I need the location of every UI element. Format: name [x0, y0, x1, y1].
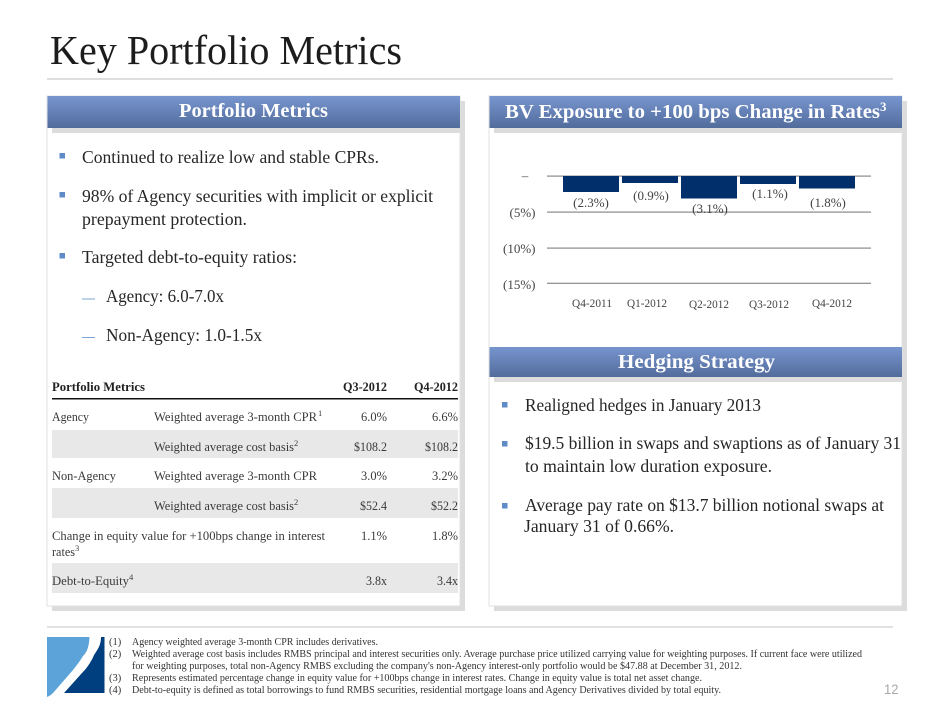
heading: portfolio metrics: Portfolio Metrics — [179, 100, 328, 122]
title: Key Portfolio Metrics — [50, 27, 402, 73]
footnotes — [109, 637, 863, 696]
table: portfolio metrics: Q4-2012 — [414, 379, 458, 394]
bullet list: portfolio metrics: 98% of Agency securities with implicit or explicit — [82, 186, 433, 206]
table: portfolio metrics: Weighted average cost basis — [154, 498, 294, 513]
bullet list: portfolio metrics: prepayment protection. — [82, 209, 247, 229]
table: portfolio metrics: $52.4 — [360, 498, 387, 513]
table: portfolio metrics: Debt-to-Equity — [52, 573, 129, 588]
table: portfolio metrics: Portfolio Metrics — [52, 379, 145, 394]
table: portfolio metrics: $108.2 — [354, 439, 387, 454]
page number: 12 — [884, 681, 899, 697]
bar chart: bv exposure: Q2-2012 — [689, 297, 729, 311]
table: portfolio metrics: Change in equity value for +100bps change in interest — [52, 528, 325, 543]
bullet list: hedging strategy: to maintain low duration exposure. — [525, 456, 772, 476]
bar chart: bv exposure: Q4-2012 — [812, 296, 852, 310]
bar chart: bv exposure: (2.3%) — [573, 195, 609, 210]
footnotes: Weighted average cost basis includes RMBS principal and interest securities only. Average purchase price utilized carrying value for weighting purposes. If current face were utilized — [132, 649, 863, 660]
heading: hedging strategy: Hedging Strategy — [618, 351, 775, 373]
icon: company logo — [47, 637, 104, 697]
bullet list: hedging strategy: $19.5 billion in swaps and swaptions as of January 31 — [525, 433, 901, 453]
heading: bv exposure: BV Exposure to +100 bps Change in Rates — [505, 101, 880, 123]
bar chart: bv exposure: (15%) — [503, 277, 536, 292]
bar chart: bv exposure — [503, 168, 871, 311]
bar chart: bv exposure: (10%) — [503, 241, 536, 256]
bullet list: hedging strategy: Average pay rate on $13.7 billion notional swaps at — [525, 495, 884, 515]
table: portfolio metrics: 2 — [294, 497, 298, 507]
table: portfolio metrics: $108.2 — [425, 439, 458, 454]
bar chart: bv exposure: (3.1%) — [692, 201, 728, 216]
table: portfolio metrics: $52.2 — [431, 498, 458, 513]
heading: portfolio metrics — [48, 96, 460, 128]
table: portfolio metrics: 6.6% — [432, 409, 458, 424]
table: portfolio metrics: 3.4x — [437, 573, 458, 588]
footnotes: (1) — [109, 637, 122, 648]
footnotes: Debt-to-equity is defined as total borrowings to fund RMBS securities, residential mortgage loans and Agency Derivatives divided by total equity. — [132, 685, 721, 696]
bullet list: portfolio metrics — [60, 147, 433, 345]
footnotes: for weighting purposes, total non-Agency RMBS excluding the company's non-Agency interest-only portfolio would be $47.88 at December 31, 2012. — [132, 661, 742, 672]
bar chart: bv exposure: (1.8%) — [810, 195, 846, 210]
table: portfolio metrics: Weighted average cost basis — [154, 439, 294, 454]
table: portfolio metrics — [52, 379, 458, 593]
bar chart: bv exposure: Q1-2012 — [627, 296, 667, 310]
bar chart: bv exposure: Q4-2011 — [572, 296, 612, 310]
bullet list: hedging strategy: Realigned hedges in January 2013 — [525, 395, 761, 415]
bar chart: bv exposure: (5%) — [510, 205, 536, 220]
table: portfolio metrics: 3.2% — [432, 468, 458, 483]
footnotes: (3) — [109, 673, 122, 684]
table: portfolio metrics: 1 — [318, 408, 322, 418]
heading: bv exposure: 3 — [880, 99, 887, 114]
heading: bv exposure — [490, 96, 902, 128]
table: portfolio metrics: 1.8% — [432, 528, 458, 543]
table: portfolio metrics: 3.0% — [361, 468, 387, 483]
footnotes: (4) — [109, 685, 122, 696]
bullet list: hedging strategy — [502, 395, 901, 536]
table: portfolio metrics: 4 — [129, 572, 134, 582]
bar chart: bv exposure: – — [521, 168, 529, 183]
bullet list: hedging strategy: January 31 of 0.66%. — [524, 516, 674, 536]
heading: hedging strategy — [490, 347, 902, 377]
table: portfolio metrics: 1.1% — [361, 528, 387, 543]
bar chart: bv exposure: Q3-2012 — [749, 297, 789, 311]
table: portfolio metrics: 6.0% — [361, 409, 387, 424]
bullet list: portfolio metrics: Targeted debt-to-equity ratios: — [82, 247, 297, 267]
table: portfolio metrics: 2 — [294, 438, 298, 448]
bar chart: bv exposure: (0.9%) — [633, 188, 669, 203]
table: portfolio metrics: 3.8x — [366, 573, 387, 588]
table: portfolio metrics: 3 — [75, 543, 79, 553]
panel: bv exposure and hedging — [489, 96, 907, 611]
footnotes: Represents estimated percentage change in equity value for +100bps change in interest rates. Change in equity value is total net asset change. — [132, 673, 702, 684]
table: portfolio metrics: Weighted average 3-month CPR — [154, 409, 317, 424]
table: portfolio metrics: Non-Agency — [52, 468, 116, 483]
footnotes: (2) — [109, 649, 122, 660]
bullet list: portfolio metrics: Continued to realize low and stable CPRs. — [82, 147, 379, 167]
table: portfolio metrics: rates — [52, 544, 75, 559]
panel: portfolio metrics — [47, 96, 465, 611]
table: portfolio metrics: Q3-2012 — [343, 379, 387, 394]
footnotes: Agency weighted average 3-month CPR includes derivatives. — [132, 637, 378, 648]
table: portfolio metrics: Weighted average 3-month CPR — [154, 468, 317, 483]
bullet list: portfolio metrics: Non-Agency: 1.0-1.5x — [106, 325, 262, 345]
bar chart: bv exposure: (1.1%) — [752, 186, 788, 201]
table: portfolio metrics: Agency — [52, 409, 89, 424]
bullet list: portfolio metrics: Agency: 6.0-7.0x — [106, 286, 224, 306]
